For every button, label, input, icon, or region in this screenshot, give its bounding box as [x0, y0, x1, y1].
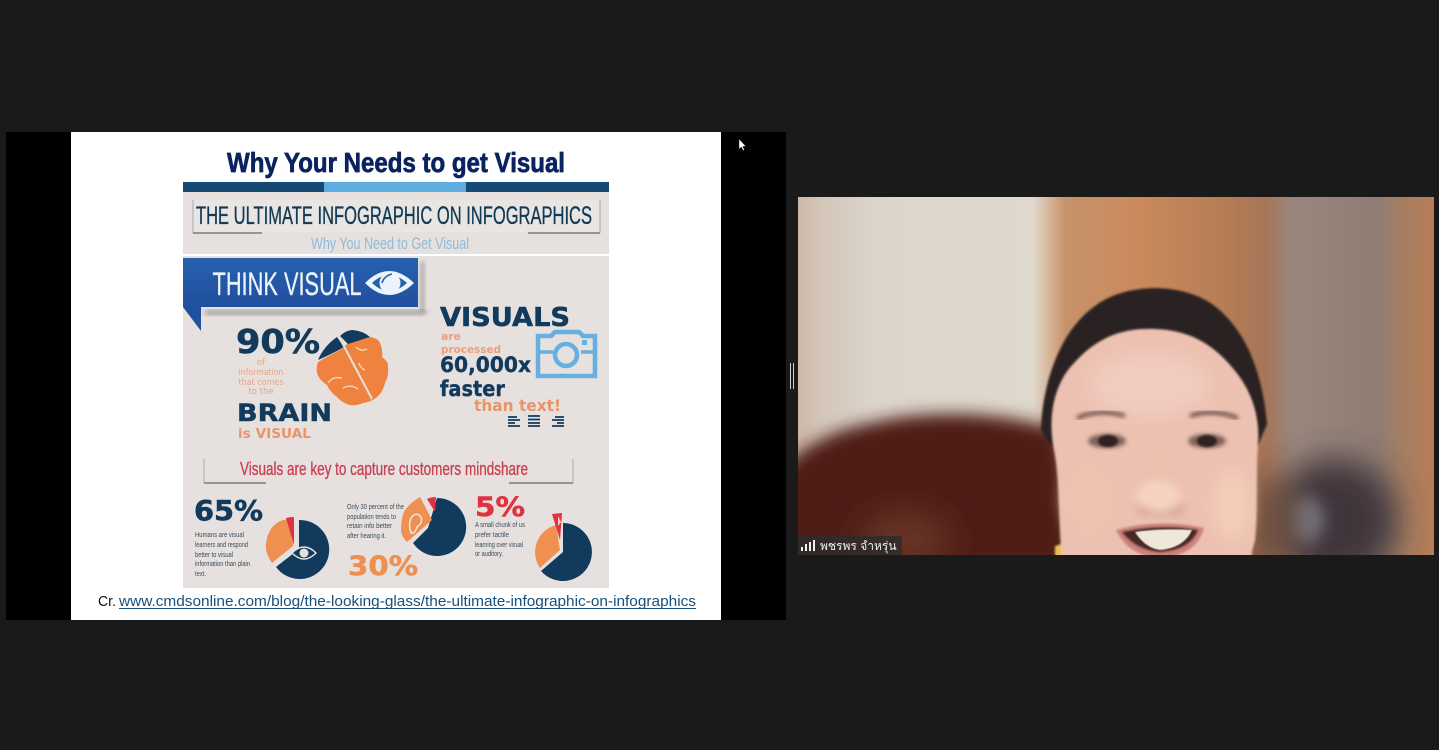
- block: 90 percent brain: of: [257, 358, 266, 368]
- stat: 5 percent: 5%: [475, 492, 525, 523]
- stat: 5 percent: prefer tactile: [475, 532, 509, 539]
- stat: 30 percent: 30%: [348, 551, 418, 582]
- block: visuals 60,000x: 60,000x: [440, 353, 531, 377]
- block: visuals 60,000x: than text!: [474, 396, 561, 415]
- stat: 65 percent: [194, 494, 329, 579]
- infographic title: THE ULTIMATE INFOGRAPHIC ON INFOGRAPHICS: [196, 202, 592, 230]
- infographic body panel: [183, 256, 609, 588]
- block: 90 percent brain: that comes: [238, 378, 284, 388]
- divider handle: [790, 363, 794, 389]
- background: dark object: [1273, 458, 1397, 582]
- subheading: customers mindshare: Visuals are key to capture customers mindshare: [240, 458, 528, 479]
- stat: 5 percent: or auditory.: [475, 551, 503, 558]
- block: 90 percent brain: is VISUAL: [238, 427, 311, 442]
- icon: brain: [317, 330, 388, 405]
- block: 90 percent brain: BRAIN: [237, 399, 332, 427]
- icon: eye: [365, 271, 414, 295]
- source credit: Cr.: [98, 593, 116, 610]
- slide title: Why Your Needs to get Visual: [227, 147, 565, 178]
- hair: [1041, 288, 1267, 445]
- stat: 30 percent: retain info better: [347, 523, 393, 530]
- infographic header panel: [183, 192, 609, 254]
- stat: 65 percent: 65%: [194, 494, 263, 527]
- icon: text lines: [508, 416, 564, 426]
- infographic subtitle: Why You Need to Get Visual: [311, 234, 469, 253]
- panel: shared screen: [6, 132, 786, 620]
- block: visuals 60,000x: [440, 303, 596, 426]
- name tag: [798, 536, 902, 555]
- source credit: www.cmdsonline.com/blog/the-looking-glass/the-ultimate-infographic-on-infographics: [118, 593, 696, 610]
- block: visuals 60,000x: faster: [440, 377, 506, 401]
- background: sofa: [798, 401, 1062, 555]
- panel: speaker video: [780, 197, 1434, 582]
- name tag: พชรพร จำหรุ่น: [820, 539, 897, 554]
- block: 90 percent brain: to the: [248, 387, 274, 397]
- stat: 65 percent: Humans are visual: [195, 532, 244, 539]
- infographic header bar: [183, 182, 609, 192]
- icon: camera: [538, 332, 596, 376]
- stat: 30 percent: [347, 497, 466, 582]
- eyes: [1088, 434, 1126, 448]
- mouse cursor: [739, 139, 746, 150]
- stat: 30 percent: Only 30 percent of the: [347, 504, 404, 511]
- block: 90 percent brain: information: [238, 368, 284, 378]
- block: 90 percent brain: [236, 322, 388, 442]
- stat: 5 percent: [475, 492, 592, 581]
- block: visuals 60,000x: VISUALS: [440, 303, 570, 333]
- block: visuals 60,000x: are: [441, 330, 461, 343]
- subheading: customers mindshare: [204, 458, 573, 483]
- slide page: [71, 132, 721, 620]
- banner: think visual: THINK VISUAL: [212, 266, 362, 302]
- banner: think visual: [183, 258, 428, 331]
- block: 90 percent brain: 90%: [236, 322, 320, 361]
- collar: [1054, 543, 1253, 555]
- mouth: [1116, 523, 1204, 558]
- stat: 65 percent: better to visual: [195, 552, 233, 559]
- stat: 65 percent: learners and respond: [195, 542, 248, 549]
- block: visuals 60,000x: processed: [441, 343, 501, 356]
- pie chart: 30 percent: [401, 497, 466, 556]
- stat: 5 percent: A small chunk of us: [475, 522, 525, 529]
- stat: 65 percent: text.: [195, 571, 206, 578]
- stat: 30 percent: population tends to: [347, 514, 396, 521]
- speaker: [1041, 288, 1267, 560]
- icon: signal bars: [801, 540, 815, 551]
- stat: 30 percent: after hearing it.: [347, 533, 386, 540]
- pie chart: 65 percent: [266, 517, 329, 579]
- face: [1052, 329, 1258, 560]
- stat: 65 percent: information than plain: [195, 561, 250, 568]
- stat: 5 percent: learning over visual: [475, 542, 523, 549]
- eyebrows: [1077, 412, 1238, 418]
- pie chart: 5 percent: [535, 513, 592, 581]
